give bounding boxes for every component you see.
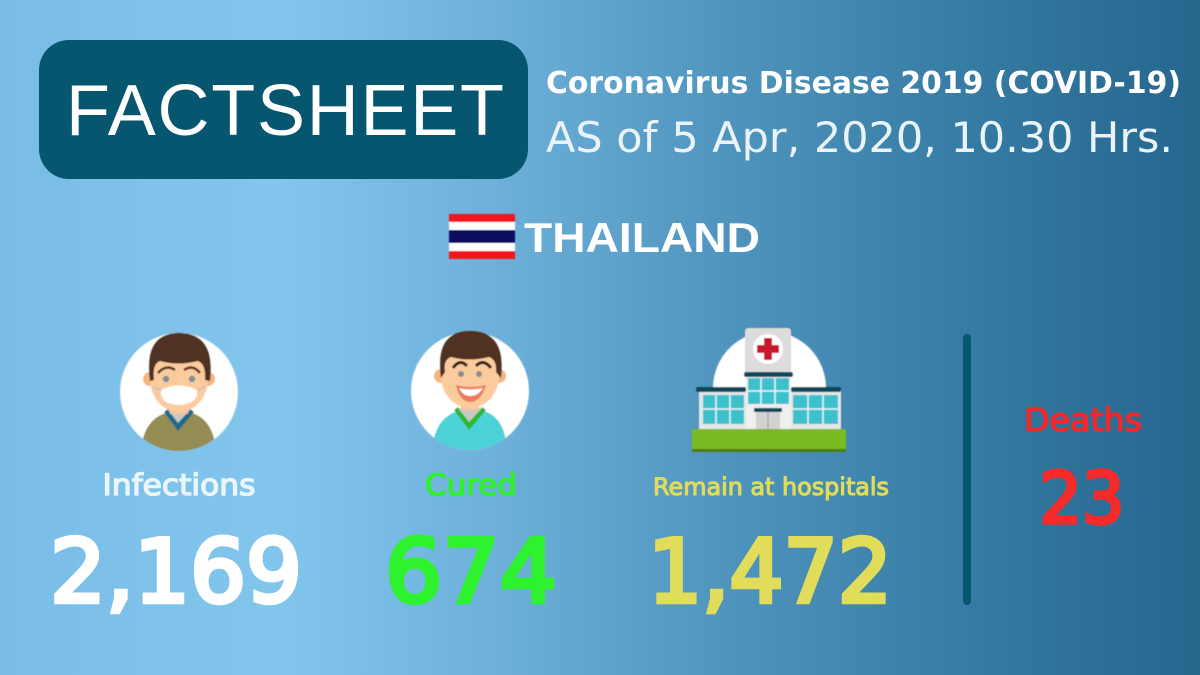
country name: THAILAND [524, 214, 760, 261]
title badge: FACTSHEET [39, 40, 528, 179]
vertical divider [963, 334, 971, 605]
label: Cured: Cured [425, 468, 517, 502]
label: Deaths: Deaths [1024, 401, 1142, 439]
icon: masked man [120, 333, 238, 452]
value: Cured: 674 [385, 521, 557, 623]
value: Remain at hospitals: 1,472 [648, 521, 892, 623]
icon: smiling man [411, 331, 529, 452]
value: Deaths: 23 [1040, 457, 1124, 540]
title badge: FACTSHEET: FACTSHEET [66, 71, 504, 151]
label: Infections: Infections [102, 468, 256, 502]
country heading [449, 214, 760, 261]
icon: hospital [692, 328, 846, 452]
heading: disease name: Coronavirus Disease 2019 (COVID-19) [546, 66, 1181, 101]
value: Infections: 2,169 [50, 521, 302, 623]
icon: Thai flag [449, 214, 515, 259]
heading: date: AS of 5 Apr, 2020, 10.30 Hrs. [546, 113, 1173, 162]
label: Remain at hospitals: Remain at hospitals [653, 473, 889, 501]
